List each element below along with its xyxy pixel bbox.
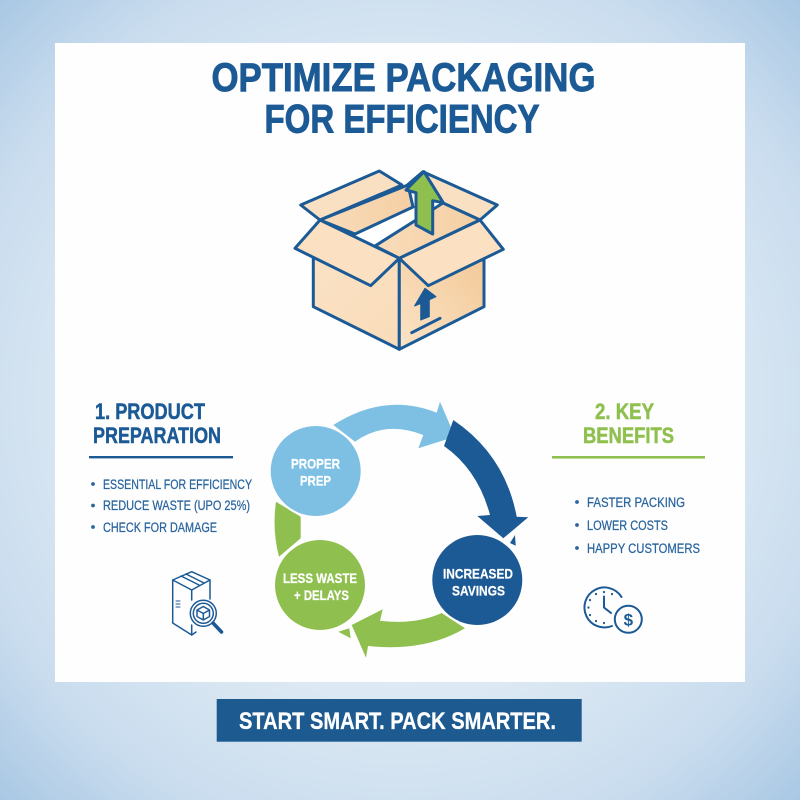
- node: increased savings: [430, 533, 524, 627]
- bullet list: product preparation: ESSENTIAL FOR EFFICIENCY: [103, 477, 252, 492]
- title: [212, 56, 596, 142]
- this-way-up bar: [412, 318, 440, 333]
- section: key benefits: [552, 399, 705, 556]
- small blue up arrow: [414, 288, 436, 320]
- arrow fragment: dark blue: [510, 535, 516, 546]
- title: FOR EFFICIENCY: [264, 98, 540, 142]
- divider: blue: [89, 456, 233, 458]
- arrow: light blue: [333, 402, 455, 448]
- bullet list: product preparation: [91, 477, 252, 535]
- inner right panel: [375, 203, 480, 258]
- right inner panel edge: [399, 220, 480, 258]
- icon: clock with dollar coin: $: [624, 610, 634, 630]
- node: proper prep: PROPER: [291, 456, 340, 472]
- node: proper prep: PREP: [300, 472, 331, 488]
- bullet list: key benefits: LOWER COSTS: [587, 518, 668, 533]
- title: OPTIMIZE PACKAGING: [212, 56, 596, 100]
- arrow: green bottom: [352, 609, 465, 658]
- box opening: [355, 203, 443, 246]
- inner left panel: [320, 185, 413, 234]
- box right face: [399, 258, 484, 349]
- heading: key benefits: 2. KEY: [595, 399, 654, 424]
- back left flap: [301, 171, 402, 220]
- arrow: green left: [275, 502, 301, 557]
- bullet list: key benefits: HAPPY CUSTOMERS: [587, 541, 700, 556]
- cycle diagram: [269, 402, 528, 658]
- arrow: dark blue: [444, 420, 528, 538]
- node: increased savings: SAVINGS: [452, 582, 505, 598]
- panel: main white card: [55, 43, 745, 682]
- node: less waste + delays: + DELAYS: [294, 587, 349, 603]
- heading: key benefits: [583, 399, 674, 448]
- heading: product preparation: [93, 399, 221, 448]
- box left face: [313, 258, 399, 349]
- node: less waste + delays: LESS WASTE: [283, 570, 357, 586]
- front right flap: [399, 220, 503, 286]
- heading: product preparation: PREPARATION: [93, 423, 221, 448]
- heading: key benefits: BENEFITS: [583, 423, 674, 448]
- banner: call to action: START SMART. PACK SMARTER.: [239, 708, 556, 735]
- icon: clock with dollar coin: [584, 587, 642, 633]
- bullet list: product preparation: REDUCE WASTE (UPO 25%): [103, 498, 250, 513]
- heading: product preparation: 1. PRODUCT: [95, 399, 205, 424]
- bullet list: product preparation: CHECK FOR DAMAGE: [103, 520, 217, 535]
- back right flap: [405, 172, 497, 220]
- node: proper prep: [269, 424, 363, 518]
- arrow fragment: green: [338, 628, 351, 638]
- icon: open cardboard box with arrow: [295, 171, 503, 349]
- node: less waste + delays: [273, 538, 367, 632]
- node: increased savings: INCREASED: [443, 566, 513, 582]
- bullet list: key benefits: [575, 495, 700, 556]
- green arrow: [406, 172, 443, 234]
- bullet list: key benefits: FASTER PACKING: [587, 495, 685, 510]
- divider: green: [552, 456, 705, 459]
- icon: box with magnifying glass: [173, 572, 222, 635]
- section: product preparation: [89, 399, 252, 535]
- front left flap: [295, 220, 399, 286]
- banner: call to action: [217, 699, 582, 742]
